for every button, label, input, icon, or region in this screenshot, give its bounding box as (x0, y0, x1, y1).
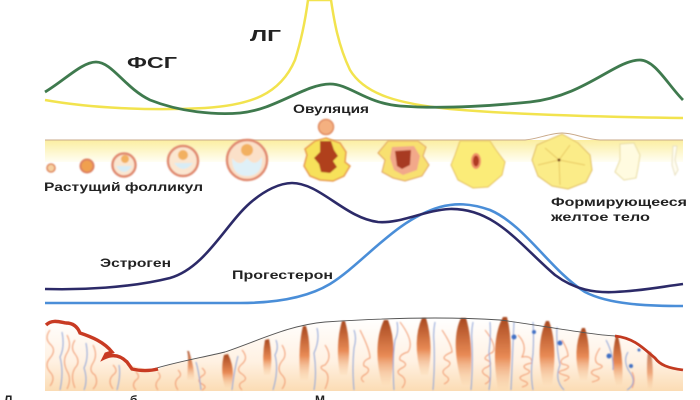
corpus luteum middle (451, 141, 505, 188)
corpus albicans (672, 146, 678, 175)
corpus luteum mature (532, 134, 592, 189)
blue vessels (60, 322, 633, 390)
label: growing follicle: Растущий фолликул (44, 180, 203, 194)
follicle 5 (227, 140, 267, 180)
FSH curve (green) (45, 60, 683, 114)
label: forming corpus luteum: Формирующееся (551, 195, 687, 209)
blue vessel nodes (512, 330, 640, 368)
gland convolutions orange (47, 322, 634, 390)
label: estrogen: Эстроген (100, 258, 171, 270)
ovary band (45, 133, 683, 162)
label: forming corpus luteum: желтое тело (550, 210, 650, 224)
ovulating follicle (304, 120, 350, 181)
corpus luteum regressing (615, 143, 640, 180)
label: ovulation: Овуляция (293, 104, 369, 116)
endometrium (45, 317, 683, 391)
LH curve (yellow) (45, 0, 683, 118)
follicle 2 (80, 160, 94, 172)
endometrium glands and vessels (47, 317, 653, 390)
label: progesterone: Прогестерон (232, 270, 333, 282)
corpus luteum early (378, 141, 429, 181)
follicle 4 (168, 146, 198, 176)
progesterone curve (blue) (45, 204, 683, 306)
label: forming corpus luteum (550, 195, 687, 224)
menstrual shedding left (46, 321, 158, 370)
endometrium surface line (150, 318, 615, 370)
estrogen curve (dark blue) (45, 183, 683, 292)
label: FSH: ФСГ (127, 55, 177, 72)
follicle 1 (47, 164, 55, 172)
follicle and corpus luteum stages (47, 120, 678, 189)
cropped caption at bottom edge (4, 393, 325, 400)
regenerating edge right (615, 336, 683, 370)
label: LH: ЛГ (250, 28, 281, 45)
follicle 3 (112, 154, 136, 176)
